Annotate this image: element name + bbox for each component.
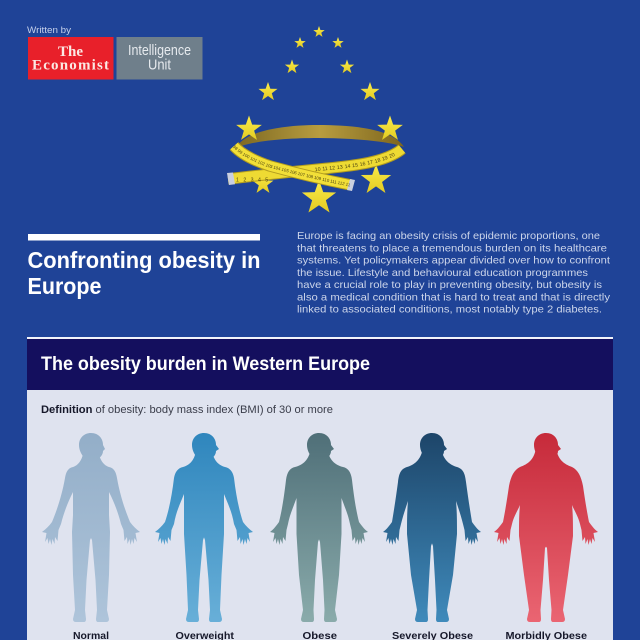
illustration: EU stars and measuring tape: 98 99 100 101 102 103 104 105 106 107 108 109 110 111 112 113 [233,146,350,186]
logo: Intelligence Unit: Intelligence [128,42,191,59]
intro text block: also a medical condition that is hard to treat and that is directly [297,291,611,303]
illustration: EU stars and measuring tape [227,26,406,212]
intro text block: systems. Yet policymakers appear divided over how to confront [297,254,610,266]
heading rule [28,234,260,240]
title: Europe [28,273,102,299]
intro text block: that threatens to place a tremendous burden on its healthcare [297,242,607,254]
figure labels [73,630,587,640]
panel: obesity burden [27,337,613,640]
figure: morbidly obese [494,433,598,622]
figure: normal [42,433,140,622]
intro text block: have a crucial role to play in preventing obesity, but obesity is [297,279,602,291]
intro text block [297,230,611,316]
definition text: Definition of obesity: body mass index (BMI) of 30 or more [41,404,333,416]
panel heading: The obesity burden in Western Europe [41,354,370,375]
illustration: EU stars and measuring tape: 1 2 3 4 5 [236,178,268,184]
panel header [27,339,613,390]
logo: The Economist [28,37,114,80]
figure: severely obese [383,433,481,622]
intro text block: the issue. Lifestyle and behavioural education programmes [297,267,588,279]
figure: obese [270,433,368,622]
figure: overweight [155,433,253,622]
intro text block: linked to associated conditions, most notably type 2 diabetes. [297,304,602,316]
logo: The Economist: Economist [32,58,109,74]
title [28,247,260,299]
title: Confronting obesity in [28,247,260,273]
logo: Intelligence Unit [116,37,202,80]
logo: The Economist: The [58,44,83,60]
illustration: EU stars and measuring tape: 10 11 12 13 14 15 16 17 18 19 20 [315,152,395,172]
intro text block: Europe is facing an obesity crisis of epidemic proportions, one [297,230,600,242]
logo: Intelligence Unit: Unit [148,56,172,74]
written by label: Written by [27,25,72,35]
